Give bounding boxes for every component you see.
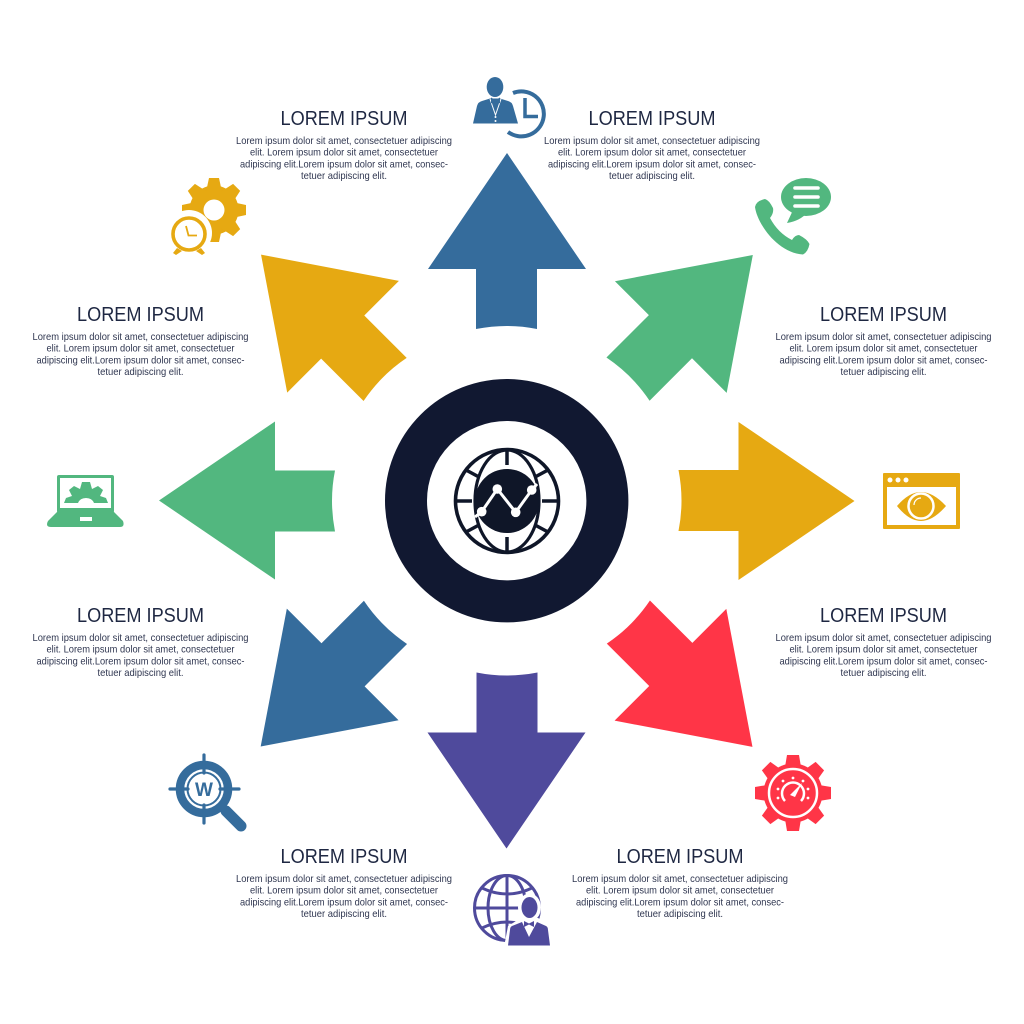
text block: top right: tetuer adipiscing elit. [609,170,695,182]
arrow: north-east [573,199,809,435]
text block: top left: tetuer adipiscing elit. [301,170,387,182]
text block: upper left: Lorem ipsum dolor sit amet, consectetuer adipiscing [32,331,249,343]
text block: lower right: tetuer adipiscing elit. [840,667,926,679]
text block: upper left: tetuer adipiscing elit. [98,366,184,378]
text block: top right: Lorem ipsum dolor sit amet, consectetuer adipiscing [544,135,760,147]
text block: top left: Lorem ipsum dolor sit amet, consectetuer adipiscing [236,135,452,147]
icon: businessman and clock [473,77,544,136]
text block: lower right [776,604,992,679]
arrow: north [428,153,586,329]
text block: bottom left: Lorem ipsum dolor sit amet, consectetuer adipiscing [236,873,452,885]
text block: bottom left: elit. Lorem ipsum dolor sit amet, consectetuer [250,885,438,897]
text block: lower left: LOREM IPSUM [77,604,204,627]
text block: lower left: tetuer adipiscing elit. [98,667,184,679]
text block: lower left: Lorem ipsum dolor sit amet, consectetuer adipiscing [32,632,249,644]
icon: globe and businessman [474,875,553,947]
arrow: east [678,422,854,580]
arrow: north-west [205,199,441,435]
icon: browser window with eye [883,473,960,529]
text block: upper right [776,303,992,378]
text block: top left [236,107,452,182]
text block: bottom left: tetuer adipiscing elit. [301,908,387,920]
icon: magnifier with target: W [195,780,213,801]
text block: lower left [32,604,249,679]
text block: bottom right: LOREM IPSUM [616,845,744,868]
text block: bottom left: adipiscing elit.Lorem ipsum dolor sit amet, consec- [240,896,448,908]
text block: top right: elit. Lorem ipsum dolor sit amet, consectetuer [558,147,746,159]
text block: lower right: elit. Lorem ipsum dolor sit amet, consectetuer [790,644,978,656]
text block: upper left: LOREM IPSUM [77,303,204,326]
arrow: south [428,672,586,848]
text block: top right: adipiscing elit.Lorem ipsum dolor sit amet, consec- [548,158,756,170]
text block: upper right: LOREM IPSUM [820,303,947,326]
text block: bottom right: tetuer adipiscing elit. [637,908,723,920]
text block: upper left: elit. Lorem ipsum dolor sit amet, consectetuer [46,343,235,355]
text block: upper right: Lorem ipsum dolor sit amet, consectetuer adipiscing [776,331,992,343]
icon: phone and speech bubble [755,178,831,254]
text block: bottom right: Lorem ipsum dolor sit amet, consectetuer adipiscing [572,873,788,885]
text block: lower right: adipiscing elit.Lorem ipsum dolor sit amet, consec- [780,655,988,667]
text block: top left: LOREM IPSUM [280,107,408,130]
text block: top right [544,107,760,182]
text block: bottom right: elit. Lorem ipsum dolor sit amet, consectetuer [586,885,774,897]
text block: upper right: tetuer adipiscing elit. [840,366,926,378]
text block: lower right: Lorem ipsum dolor sit amet, consectetuer adipiscing [776,632,992,644]
icon: gear with gauge [755,755,831,831]
text block: bottom left: LOREM IPSUM [280,845,408,868]
text block: upper right: elit. Lorem ipsum dolor sit amet, consectetuer [790,343,978,355]
arrow: south-west [205,566,441,802]
text block: top left: adipiscing elit.Lorem ipsum dolor sit amet, consec- [240,158,448,170]
center ring [406,400,607,601]
text block: top left: elit. Lorem ipsum dolor sit amet, consectetuer [250,147,438,159]
text block: top right: LOREM IPSUM [588,107,716,130]
arrow: west [159,422,335,580]
icon: center globe with line chart [456,450,558,552]
text block: upper left [32,303,249,378]
text block: lower left: adipiscing elit.Lorem ipsum dolor sit amet, consec- [36,655,245,667]
text block: bottom right [572,845,788,920]
text block: upper left: adipiscing elit.Lorem ipsum dolor sit amet, consec- [36,354,245,366]
icon: magnifier with target [170,755,241,826]
text block: lower left: elit. Lorem ipsum dolor sit amet, consectetuer [46,644,235,656]
text block: upper right: adipiscing elit.Lorem ipsum dolor sit amet, consec- [780,354,988,366]
icon: gear and alarm clock [166,178,246,256]
text block: bottom right: adipiscing elit.Lorem ipsum dolor sit amet, consec- [576,896,784,908]
text block: bottom left [236,845,452,920]
icon: laptop with gear [47,475,124,527]
arrow: south-east [572,567,808,803]
text block: lower right: LOREM IPSUM [820,604,947,627]
